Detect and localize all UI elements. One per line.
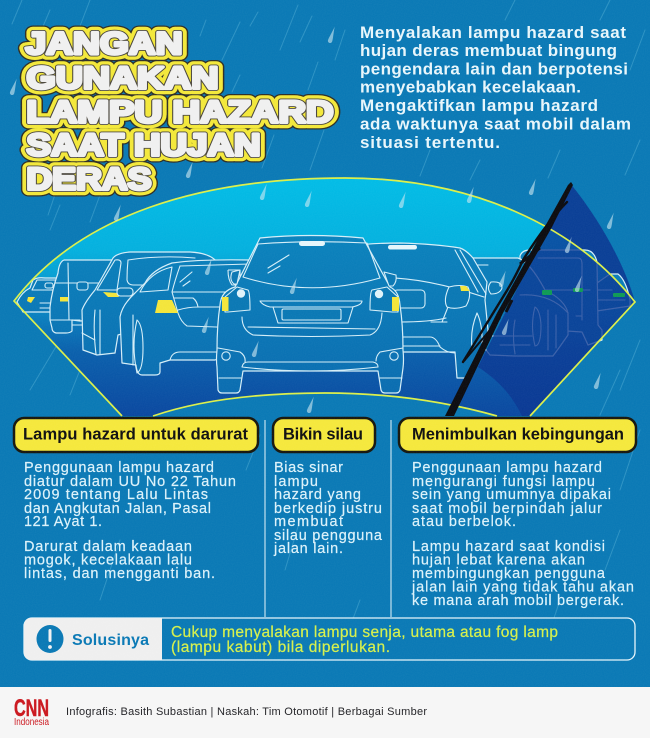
left tail lamp (225, 287, 250, 312)
mirrors (231, 270, 240, 284)
rain drops (9, 26, 616, 414)
title: LAMPU HAZARD (26, 94, 334, 130)
fourth car (50, 260, 130, 333)
title: DERAS (26, 160, 152, 196)
callout: solusinya: (lampu kabut) bila diperlukan. (171, 639, 390, 656)
title: GUNAKAN (26, 60, 218, 96)
body text: hujan lebat karena akan (412, 552, 585, 568)
amber lamp (155, 300, 178, 313)
body text: silau pengguna (274, 528, 383, 544)
body text (24, 460, 236, 582)
credits: Infografis: Basith Subastian | Naskah: Tim Otomotif | Berbagai Sumber (66, 706, 427, 718)
body text: Darurat dalam keadaan (24, 539, 192, 555)
third car on the right (470, 258, 568, 356)
body text: 121 Ayat 1. (24, 514, 102, 530)
title: JANGAN (26, 25, 182, 61)
body text: berkedip justru (274, 501, 382, 517)
brake light (388, 245, 417, 250)
footer (0, 687, 650, 738)
far right small car (590, 274, 630, 312)
right tail lamp (445, 286, 470, 308)
body text: ke mana arah mobil bergerak. (412, 593, 624, 609)
title: LAMPU HAZARD (26, 94, 334, 130)
heading pill: Bikin silau (283, 426, 363, 444)
wiped dark overlay (478, 230, 634, 416)
body text: saat mobil berpindah jalur (412, 501, 602, 517)
body text (273, 460, 383, 557)
body text: lintas, dan mengganti ban. (24, 566, 215, 582)
amber lamp (60, 297, 68, 302)
yellow lamp (460, 286, 470, 291)
cars in traffic (17, 236, 630, 393)
body text: membingungkan pengguna (412, 566, 606, 582)
rear plate (282, 309, 341, 320)
heading pill: Lampu hazard untuk darurat (23, 426, 248, 444)
lead paragraph: menyebabkan kecelakaan. (360, 78, 581, 96)
title: JANGAN (26, 25, 182, 61)
car right behind centre (350, 243, 488, 378)
far left small car (17, 278, 70, 312)
rear plate (393, 290, 425, 308)
callout: solusinya: Solusinya (72, 632, 149, 649)
fog lamps (222, 352, 230, 360)
title: GUNAKAN (26, 60, 218, 96)
logo: CNN Indonesia (14, 695, 49, 728)
callout: solusinya: Cukup menyalakan lampu senja, utama atau fog lamp (171, 624, 558, 641)
lead paragraph: Mengaktifkan lampu hazard (360, 96, 598, 115)
mirror (488, 282, 502, 294)
mirror (77, 282, 88, 290)
logo: CNN Indonesia: Indonesia (14, 717, 49, 728)
body text: jalan lain. (273, 541, 343, 557)
body text: hazard yang (274, 487, 361, 503)
body text: diatur dalam UU No 22 Tahun (24, 474, 236, 490)
body text: atau berbelok. (412, 514, 516, 530)
column dividers (265, 420, 391, 617)
amber lamp (103, 292, 119, 297)
title: LAMPU HAZARD (26, 94, 334, 130)
panel: windshield (14, 178, 635, 416)
title: SAAT HUJAN (26, 126, 260, 162)
icon: exclamation (36, 625, 64, 653)
second car from left (120, 260, 255, 375)
title: SAAT HUJAN (26, 126, 260, 162)
swept wiper area (478, 183, 635, 416)
lead paragraph: Menyalakan lampu hazard saat (360, 23, 626, 42)
mirror (117, 288, 133, 296)
body text: Penggunaan lampu hazard (24, 460, 214, 476)
body text: Penggunaan lampu hazard (412, 460, 602, 476)
lead paragraph: pengendara lain dan berpotensi (360, 60, 628, 78)
left amber lamp (27, 297, 35, 303)
title: DERAS (26, 160, 152, 196)
body text: mengurangi fungsi lampu (412, 474, 595, 490)
heading pill (399, 418, 636, 452)
title: GUNAKAN (26, 60, 218, 96)
body text: mogok, kecelakaan lalu (24, 552, 192, 568)
title: SAAT HUJAN (26, 126, 260, 162)
lead paragraph: ada waktunya saat mobil dalam (360, 114, 631, 134)
brake light (299, 241, 325, 246)
title: DERAS (26, 160, 152, 196)
van on the right (520, 250, 602, 345)
lead paragraph: hujan deras membuat bingung (360, 41, 617, 60)
heading pill: Menimbulkan kebingungan (412, 426, 624, 444)
callout: solusinya (24, 618, 635, 660)
column 2: bikin silau (273, 418, 383, 557)
body text: dan Angkutan Jalan, Pasal (24, 501, 211, 517)
title: JANGAN (26, 25, 182, 61)
right tail lamp (370, 287, 398, 312)
icon: wiper blade (445, 182, 573, 416)
heading pill (14, 418, 258, 452)
title: JANGAN (26, 25, 182, 61)
column 1: lampu hazard untuk darurat (14, 418, 258, 582)
body text: sein yang umumnya dipakai (412, 487, 611, 503)
body text: jalan lain yang tidak tahu akan (411, 580, 634, 596)
title (26, 25, 334, 196)
lead paragraph: situasi tertentu. (360, 133, 500, 152)
title: GUNAKAN (26, 60, 218, 96)
logo: CNN Indonesia: CNN (14, 695, 49, 722)
title: LAMPU HAZARD (26, 94, 334, 130)
green lights (542, 288, 625, 297)
body text: 2009 tentang Lalu Lintas (24, 487, 208, 503)
windshield outline (14, 178, 635, 416)
windshield glass (14, 178, 635, 416)
body text: membuat (274, 514, 343, 530)
body text (411, 460, 634, 609)
body text: Bias sinar (274, 460, 343, 476)
title: DERAS (26, 160, 152, 196)
body text: lampu (274, 474, 318, 490)
third car (82, 252, 218, 355)
lead paragraph (360, 23, 631, 152)
mirror (45, 283, 53, 288)
centre car (216, 236, 404, 393)
body text: Lampu hazard saat kondisi (412, 539, 605, 555)
title: SAAT HUJAN (26, 126, 260, 162)
column 3: menimbulkan kebingungan (399, 418, 636, 609)
